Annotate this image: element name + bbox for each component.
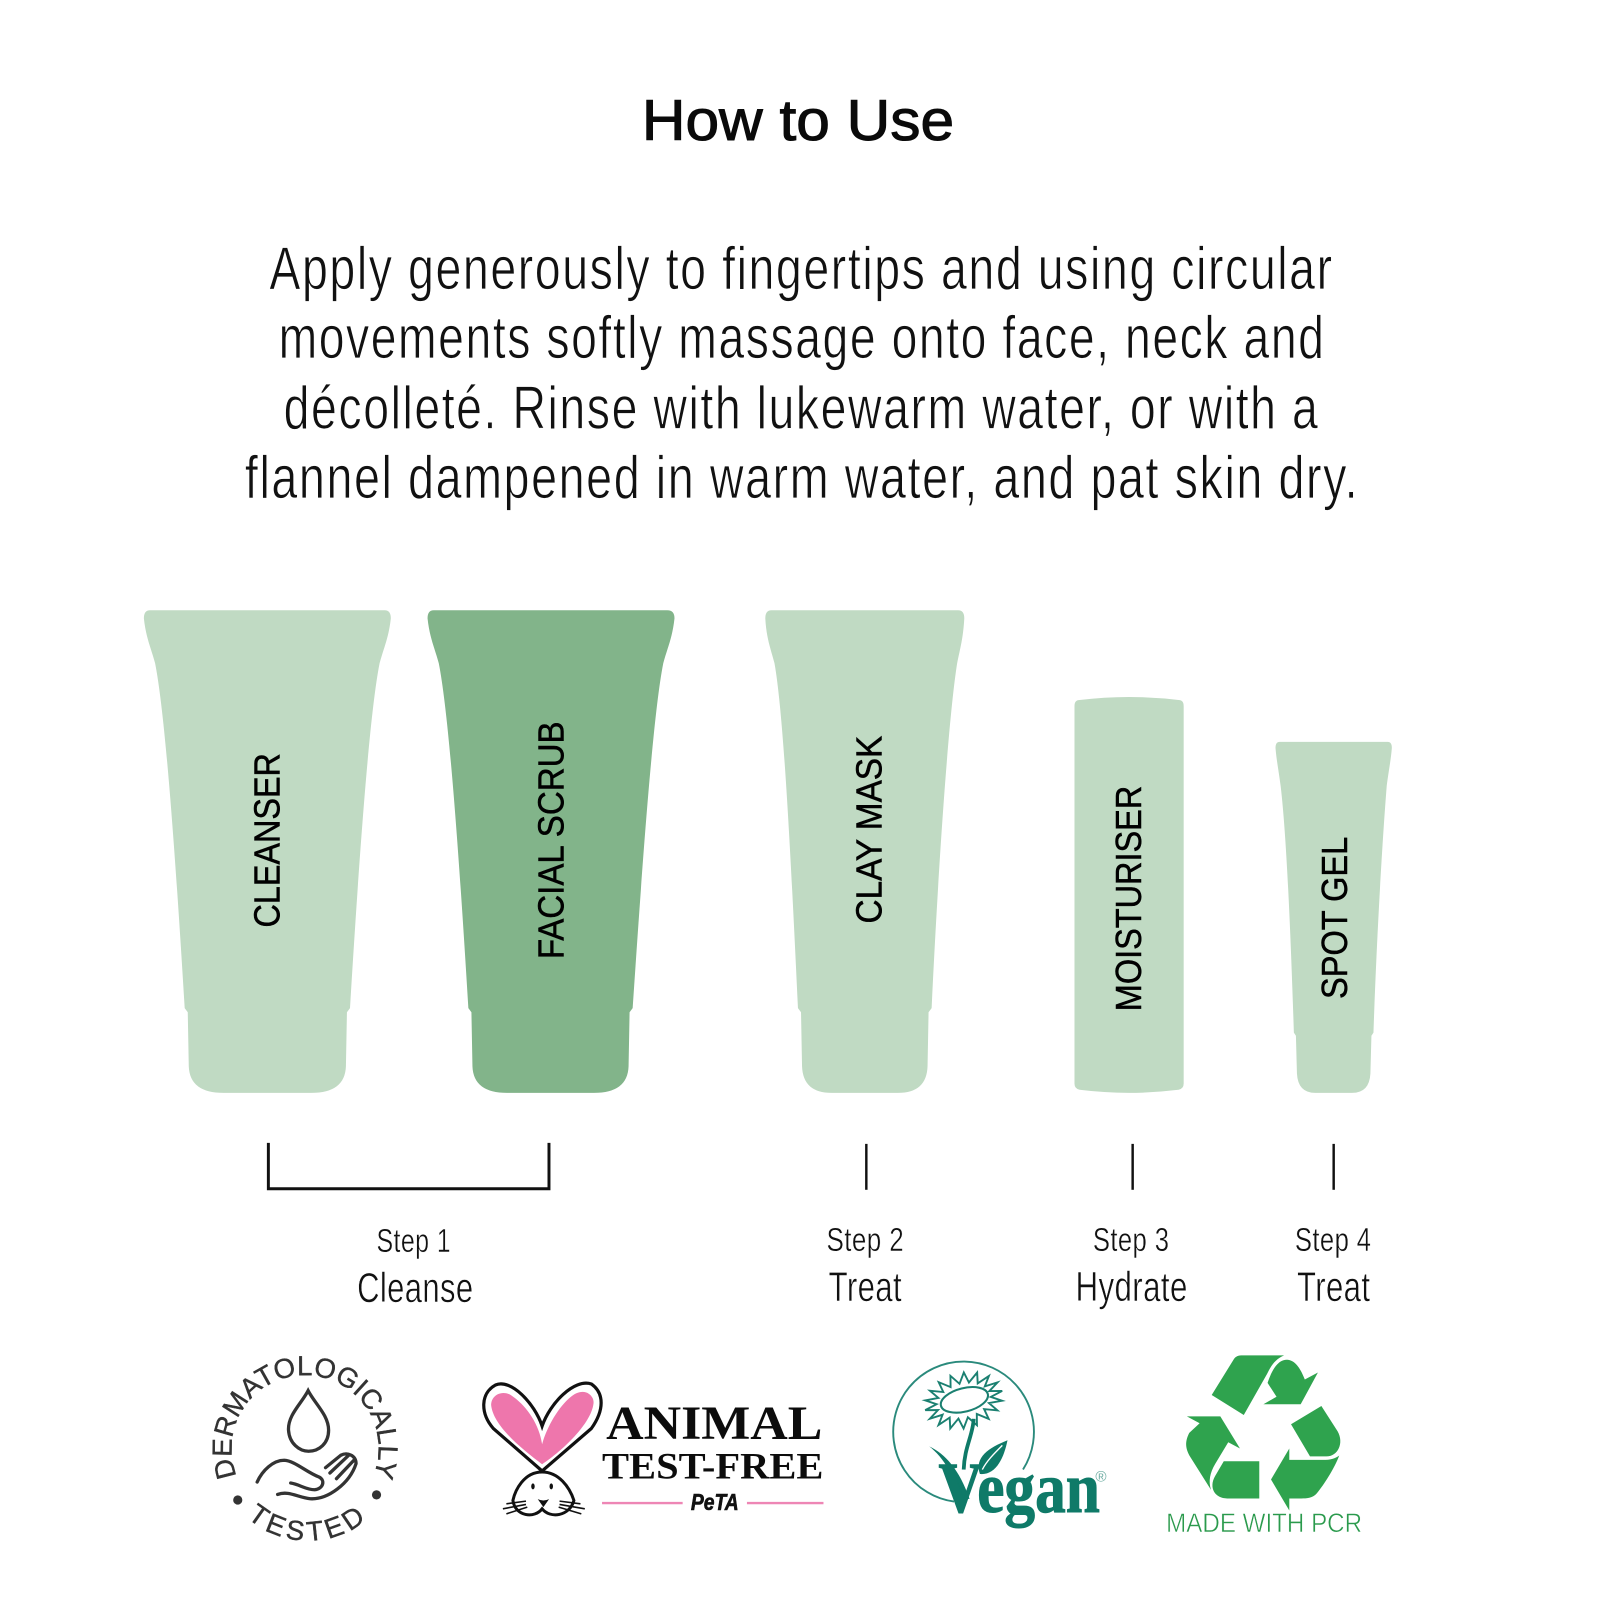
badge: vegan: Vegan xyxy=(939,1447,1100,1528)
icon: drop and hand xyxy=(257,1391,356,1499)
step 3 label: Hydrate xyxy=(1076,1263,1188,1310)
tube: moisturiser xyxy=(1074,697,1184,1093)
marker: step 4 xyxy=(1332,1144,1335,1190)
badge: PETA animal test-free xyxy=(484,1383,823,1515)
instructions text block xyxy=(245,235,1359,511)
bracket: step 1 xyxy=(268,1143,549,1189)
badge: PETA animal test-free: TEST-FREE xyxy=(602,1446,823,1487)
step 4 label: Treat xyxy=(1297,1263,1370,1310)
badge: dermatologically tested: TESTED xyxy=(252,1502,362,1541)
tube: cleanser xyxy=(144,610,391,1093)
badge: vegan: ® xyxy=(1095,1469,1107,1486)
marker: step 3 xyxy=(1131,1144,1134,1190)
step 4 label: Step 4 xyxy=(1295,1222,1371,1259)
tube: clay mask xyxy=(765,610,964,1093)
tube: cleanser: CLEANSER xyxy=(248,753,288,928)
marker: step 2 xyxy=(865,1144,868,1190)
title: How to Use xyxy=(642,89,954,153)
tube: spot gel: SPOT GEL xyxy=(1315,837,1355,999)
instructions text block: décolleté. Rinse with lukewarm water, or with a xyxy=(284,375,1319,442)
tube: facial scrub: FACIAL SCRUB xyxy=(531,721,571,959)
icon: bunny xyxy=(484,1383,601,1515)
step 2 label: Step 2 xyxy=(827,1222,904,1259)
badge: made with PCR recycling xyxy=(1166,1355,1362,1538)
badge: vegan xyxy=(893,1362,1107,1528)
tube: clay mask: CLAY MASK xyxy=(850,736,890,923)
step 2 label: Treat xyxy=(829,1263,902,1310)
step 2 label xyxy=(827,1222,904,1310)
tube: facial scrub xyxy=(428,610,674,1093)
instructions text block: movements softly massage onto face, neck and xyxy=(279,304,1326,371)
step 4 label xyxy=(1295,1222,1371,1310)
tube: moisturiser: MOISTURISER xyxy=(1109,786,1149,1011)
step 1 label: Cleanse xyxy=(357,1264,473,1311)
badge: made with PCR recycling: MADE WITH PCR xyxy=(1166,1508,1362,1538)
step 1 label: Step 1 xyxy=(377,1223,451,1260)
step 1 label xyxy=(357,1223,473,1311)
badge: dermatologically tested: DERMATOLOGICALLY xyxy=(212,1356,398,1481)
step 3 label xyxy=(1076,1222,1188,1310)
badge: PETA animal test-free: ANIMAL xyxy=(606,1397,822,1450)
badge: PETA animal test-free: PeTA xyxy=(691,1489,739,1515)
badge: dermatologically tested xyxy=(212,1356,398,1541)
tube: spot gel xyxy=(1276,742,1392,1093)
step 3 label: Step 3 xyxy=(1093,1222,1169,1259)
